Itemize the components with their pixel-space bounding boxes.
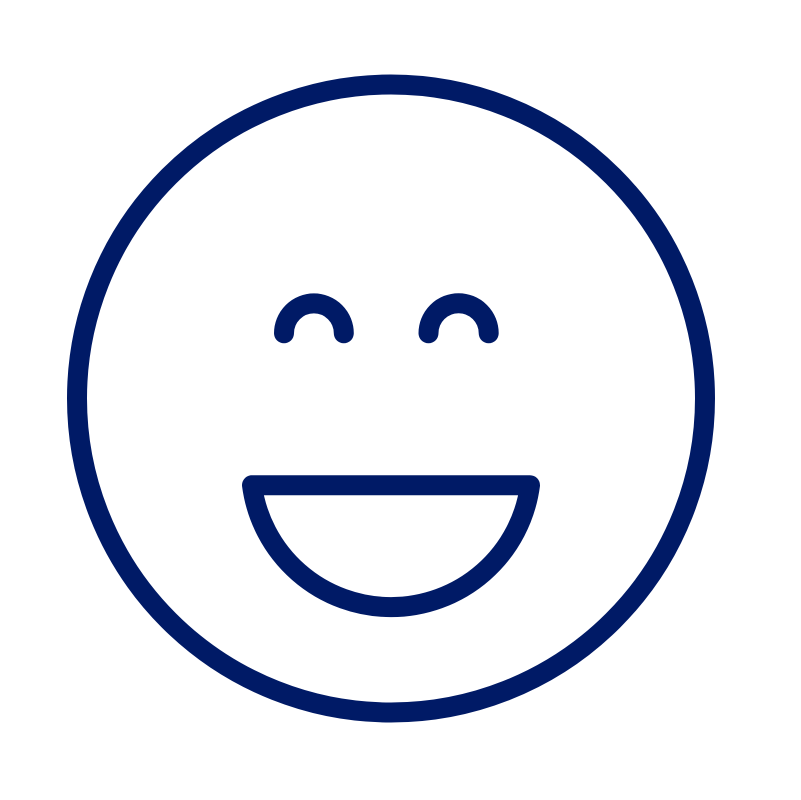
right eye [428, 303, 489, 333]
left eye [284, 303, 344, 333]
open smile [252, 485, 530, 607]
face outline [77, 84, 705, 712]
